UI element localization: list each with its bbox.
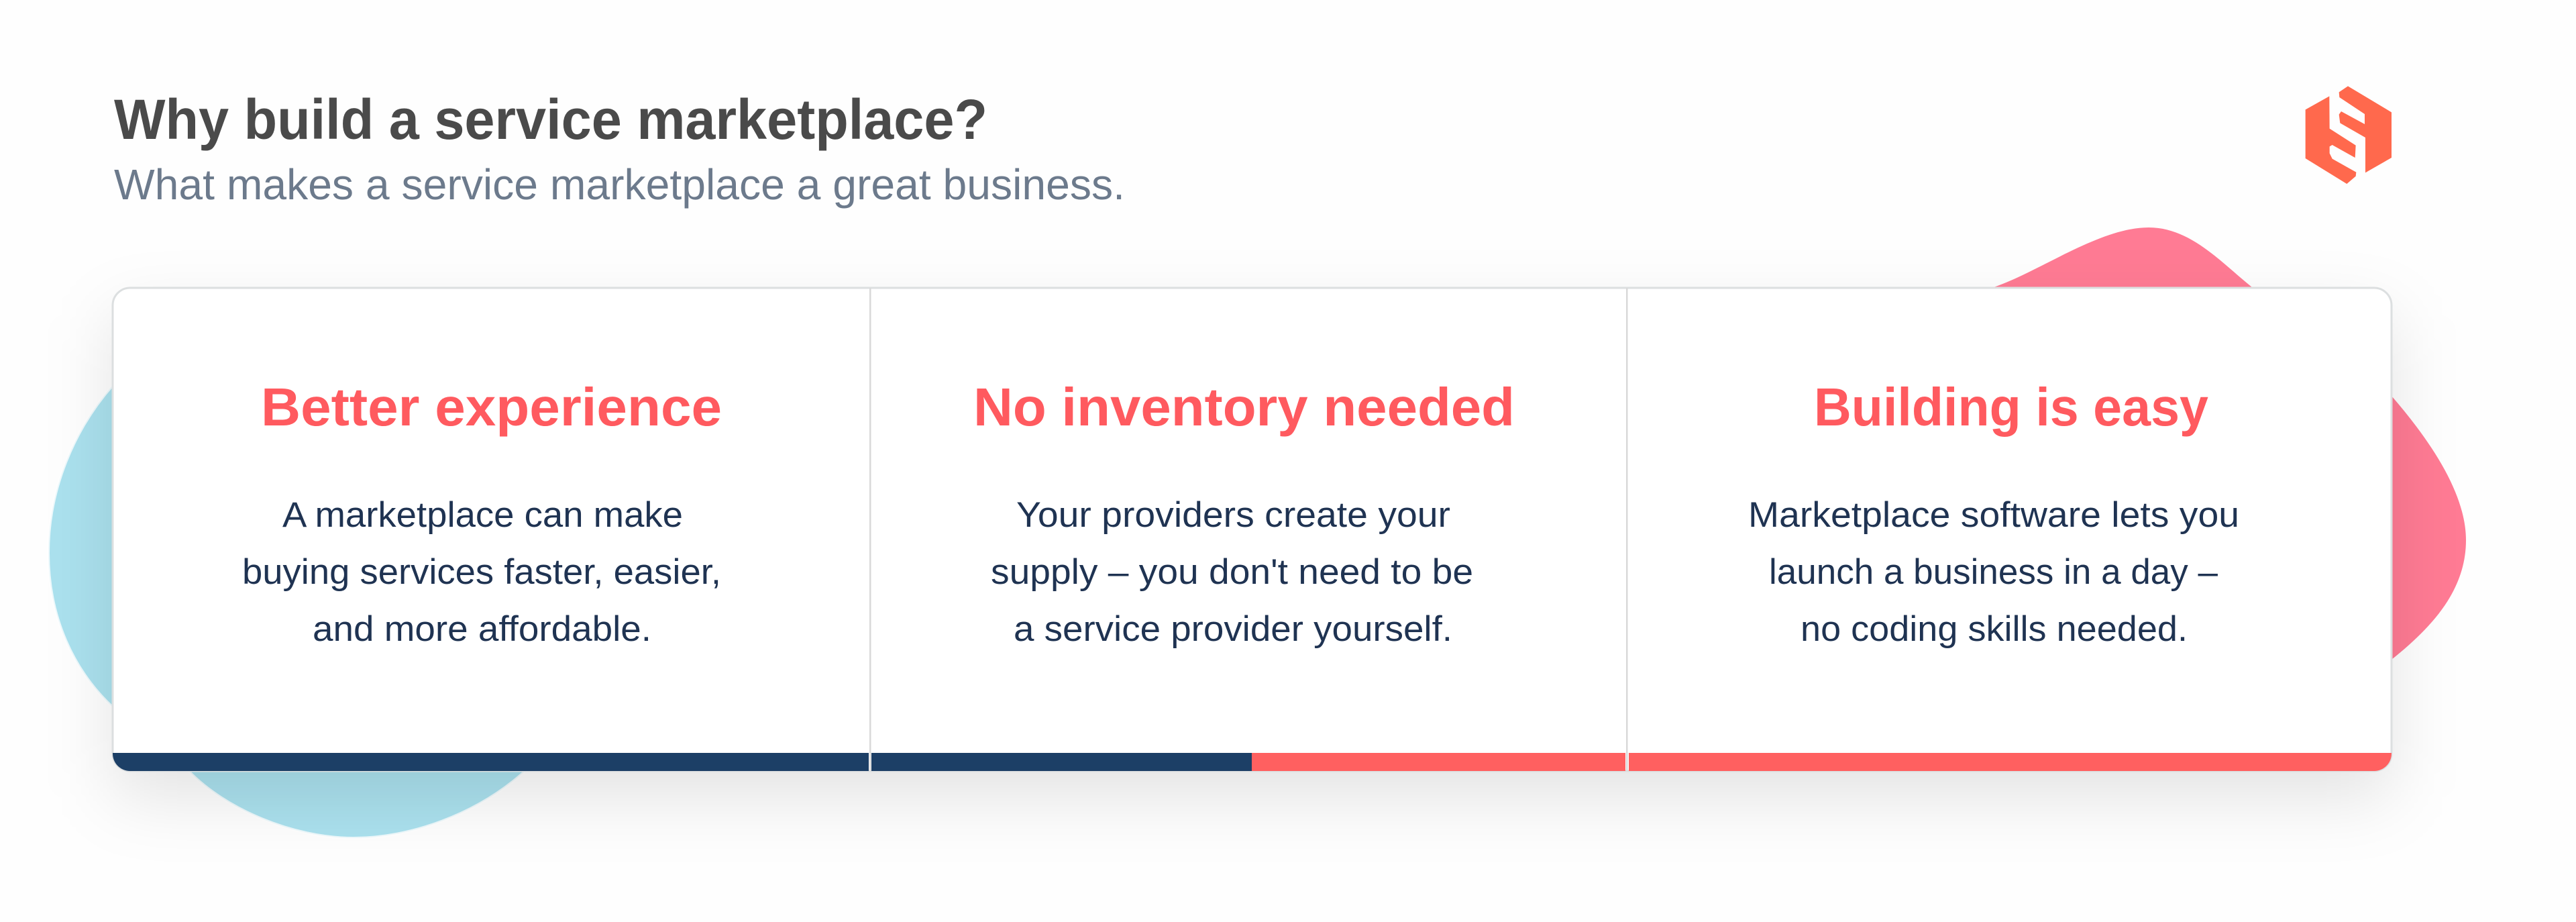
body text: no inventory needed: supply – you don't need to be [991, 552, 1473, 592]
blob: blue background shape [48, 385, 525, 838]
blob: pink background shape [1994, 227, 2466, 660]
body text: better experience: and more affordable. [313, 609, 651, 649]
subtitle: What makes a service marketplace a great business. [114, 160, 1125, 209]
card shadow [113, 315, 2392, 798]
icon: hexagon S logo [2306, 86, 2392, 184]
heading: building is easy: Building is easy [1814, 377, 2208, 437]
body text: better experience [242, 495, 721, 649]
accent bar: navy and coral segments [113, 753, 2392, 771]
body text: no inventory needed: Your providers create your [1016, 495, 1450, 535]
body text: no inventory needed: a service provider yourself. [1014, 609, 1452, 649]
heading: no inventory needed: No inventory needed [973, 377, 1515, 437]
column: no inventory needed [973, 377, 1515, 649]
body text: building is easy: no coding skills needed. [1801, 609, 2188, 649]
body text: building is easy [1748, 495, 2239, 649]
body text: building is easy: launch a business in a day – [1769, 552, 2218, 592]
body text: building is easy: Marketplace software lets you [1748, 495, 2239, 535]
body text: better experience: buying services faster, easier, [242, 552, 721, 592]
body text: no inventory needed [991, 495, 1473, 649]
panel: three column card [113, 288, 2392, 771]
heading: better experience: Better experience [261, 377, 722, 437]
title: Why build a service marketplace? [114, 88, 987, 151]
column: building is easy [1748, 377, 2239, 649]
column: better experience [242, 377, 722, 649]
body text: better experience: A marketplace can make [282, 495, 683, 535]
